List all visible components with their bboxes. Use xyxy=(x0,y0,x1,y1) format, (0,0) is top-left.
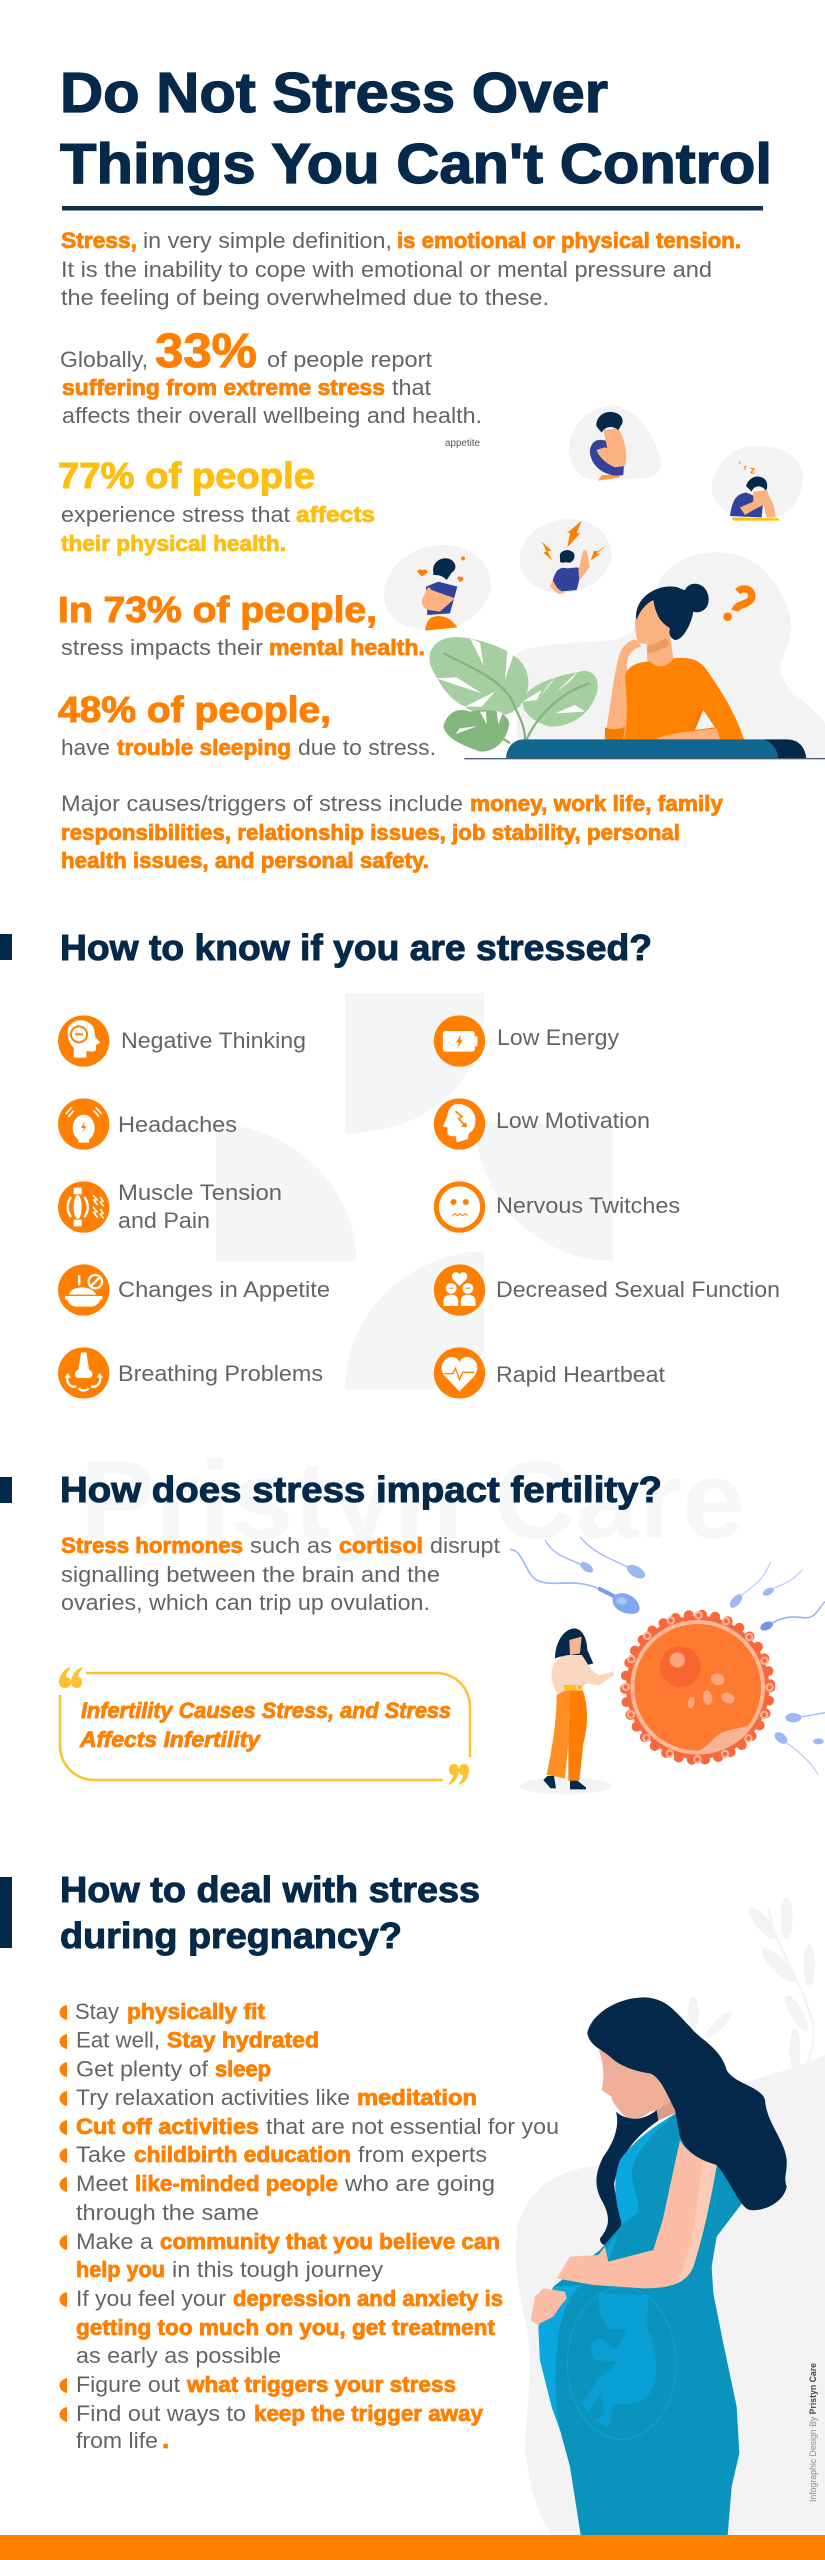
label: rapid heartbeat: Rapid Heartbeat xyxy=(496,1362,665,1387)
sperm cells xyxy=(510,1537,825,1775)
list: coping tips: Get plenty of xyxy=(76,2056,209,2082)
list: coping tips: through the same xyxy=(76,2200,259,2225)
list: coping tips: that are not essential for you xyxy=(266,2114,559,2139)
design credit: Infographic Design By Pristyn Care xyxy=(808,2363,818,2502)
stray label: appetite: appetite xyxy=(445,438,480,449)
heading: deal with stress: How to deal with stress xyxy=(60,1869,480,1910)
label: low energy: Low Energy xyxy=(497,1025,619,1050)
stat: 77 percent: 77% of people xyxy=(58,455,315,496)
bubble: anger with lightning xyxy=(520,519,612,594)
list: coping tips: childbirth education xyxy=(134,2142,351,2167)
callout xyxy=(59,1667,470,1785)
symptoms grid xyxy=(58,1015,780,1399)
list: coping tips: as early as possible xyxy=(76,2343,281,2368)
stat: 73 percent: In 73% of people, xyxy=(58,589,377,630)
icon: decreased sexual function xyxy=(434,1264,485,1316)
list: coping tips: physically fit xyxy=(127,1999,266,2024)
egg cell xyxy=(625,1615,770,1760)
stat: 33 percent: affects their overall wellbeing and health. xyxy=(62,403,482,428)
text block: major causes: responsibilities, relationship issues, job stability, personal xyxy=(61,820,680,845)
list: coping tips: who are going xyxy=(344,2171,495,2196)
list: coping tips: help you xyxy=(76,2257,165,2282)
icon: muscle tension xyxy=(58,1181,109,1233)
illustration: pregnant woman xyxy=(516,1898,825,2535)
bubble: sleepless: z xyxy=(750,465,755,476)
label: decreased sexual function: Decreased Sexual Function xyxy=(496,1277,780,1302)
text block: stress hormones: such as xyxy=(250,1533,332,1558)
title: Do Not Stress Over xyxy=(60,61,608,125)
title xyxy=(60,61,772,196)
stat: 33 percent: suffering from extreme stress xyxy=(62,375,385,400)
desk xyxy=(464,739,825,759)
list: coping tips: Cut off activities xyxy=(76,2114,259,2139)
bubble: sleepless: z xyxy=(739,460,741,465)
text block: stress definition: in very simple definition, xyxy=(143,228,392,253)
stat: 48 percent: trouble sleeping xyxy=(117,735,291,760)
backdrop blob xyxy=(517,552,825,758)
label: muscle tension and pain: Muscle Tension xyxy=(118,1180,282,1205)
list: coping tips: Make a xyxy=(76,2229,154,2254)
front hair lock xyxy=(596,2110,658,2245)
bullets xyxy=(60,2005,67,2422)
text block: stress definition: It is the inability to cope with emotional or mental pressure and xyxy=(61,257,712,282)
stat: 48 percent: 48% of people, xyxy=(58,689,331,730)
stat: 77 percent: affects xyxy=(296,502,375,527)
list: coping tips: from experts xyxy=(358,2142,487,2167)
list: coping tips: Figure out xyxy=(76,2372,180,2397)
stat: 77 percent: experience stress that xyxy=(61,502,290,527)
label: nervous twitches: Nervous Twitches xyxy=(496,1193,680,1218)
backdrop blob xyxy=(516,2055,825,2535)
text block: stress hormones: ovaries, which can trip up ovulation. xyxy=(61,1590,430,1615)
label: changes in appetite: Changes in Appetite xyxy=(118,1277,330,1302)
list: coping tips: what triggers your stress xyxy=(186,2372,456,2397)
icon: negative thinking xyxy=(58,1015,109,1067)
unborn baby xyxy=(567,2287,676,2439)
list: coping tips: Stay hydrated xyxy=(167,2028,319,2052)
background leaves xyxy=(688,1898,815,2073)
list: coping tips: Eat well, xyxy=(76,2028,160,2052)
label: low motivation: Low Motivation xyxy=(496,1108,650,1133)
stat: 33 percent: that xyxy=(392,375,431,400)
list: coping tips xyxy=(60,1999,559,2454)
label: negative thinking: Negative Thinking xyxy=(121,1028,306,1053)
text block: stress hormones: Stress hormones xyxy=(61,1533,243,1558)
text block: stress definition: is emotional or physical tension. xyxy=(397,228,741,253)
list: coping tips: Take xyxy=(76,2142,126,2167)
lower hand xyxy=(531,2288,567,2325)
text block: stress hormones: cortisol xyxy=(339,1533,423,1558)
list: coping tips: like-minded people xyxy=(135,2171,338,2196)
text block: stress definition: Stress, xyxy=(61,228,137,253)
illustration: woman beside egg and sperm xyxy=(510,1537,825,1794)
list: coping tips: Try relaxation activities like xyxy=(76,2085,350,2110)
title: Things You Can't Control xyxy=(60,132,772,196)
closing quote mark xyxy=(449,1764,469,1785)
stat: 33 percent: of people report xyxy=(267,347,432,372)
title rule xyxy=(62,206,763,210)
label: muscle tension and pain: and Pain xyxy=(118,1208,210,1233)
watermark: Pristyn Care xyxy=(80,1439,745,1562)
label: breathing problems: Breathing Problems xyxy=(118,1361,323,1386)
heading: how to know: How to know if you are stressed? xyxy=(60,927,652,968)
list: coping tips: keep the trigger away xyxy=(254,2401,484,2426)
icon: nervous twitches xyxy=(434,1181,485,1233)
stat: 73 percent xyxy=(58,589,425,660)
list: coping tips: community that you believe can xyxy=(160,2229,500,2254)
stat: 77 percent xyxy=(58,455,375,556)
section marker xyxy=(0,1877,12,1948)
list: coping tips: sleep xyxy=(215,2056,271,2082)
callout text: Affects Infertility xyxy=(79,1727,262,1752)
stat: 77 percent: their physical health. xyxy=(61,531,286,556)
text block: stress hormones: signalling between the brain and the xyxy=(61,1562,440,1587)
face xyxy=(598,2050,677,2119)
heading: fertility: How does stress impact fertility? xyxy=(60,1469,662,1510)
list: coping tips: in this tough journey xyxy=(172,2257,383,2282)
list: coping tips: Stay xyxy=(75,1999,119,2024)
text block: stress hormones: disrupt xyxy=(430,1533,500,1558)
bubble: face in hands xyxy=(569,406,661,481)
list: coping tips: depression and anxiety is xyxy=(233,2286,503,2311)
callout text: Infertility Causes Stress, and Stress xyxy=(81,1698,451,1723)
bubble: sleepless xyxy=(712,446,803,521)
list: coping tips: meditation xyxy=(357,2085,477,2110)
icon: low energy xyxy=(434,1015,485,1067)
section marker xyxy=(0,1477,12,1503)
stat: 33 percent: 33% xyxy=(155,325,257,378)
neck xyxy=(655,2100,678,2121)
text block: stress hormones xyxy=(61,1533,500,1615)
icon: rapid heartbeat xyxy=(434,1347,485,1399)
text block: major causes xyxy=(61,791,724,873)
bubble: sleepless: z xyxy=(743,464,747,471)
thinking woman xyxy=(605,584,744,739)
ground shadow xyxy=(520,1778,611,1794)
stat: 33 percent: Globally, xyxy=(60,347,148,372)
illustration: thinking woman with stress bubbles xyxy=(384,406,825,759)
stat: 48 percent xyxy=(58,689,436,760)
list: coping tips: If you feel your xyxy=(76,2286,226,2311)
opening quote mark xyxy=(59,1667,82,1688)
hair xyxy=(587,1997,787,2210)
icon: breathing problems xyxy=(58,1347,109,1399)
list: coping tips: Find out ways to xyxy=(76,2401,246,2426)
footer bar xyxy=(0,2535,825,2560)
dress highlight xyxy=(607,2113,677,2260)
icon: changes in appetite xyxy=(58,1264,109,1316)
text block: stress definition xyxy=(61,228,741,310)
stat: 33 percent xyxy=(60,325,482,428)
list: coping tips: Meet xyxy=(76,2171,128,2196)
bubble: self hug with hearts xyxy=(384,545,491,631)
background logo shapes xyxy=(216,993,613,1389)
text block: major causes: money, work life, family xyxy=(470,791,724,816)
list: coping tips: from life xyxy=(76,2428,158,2453)
heading: deal with stress: during pregnancy? xyxy=(60,1915,402,1956)
stat: 73 percent: stress impacts their xyxy=(61,635,263,660)
callout text xyxy=(79,1698,451,1752)
text block: stress definition: the feeling of being overwhelmed due to these. xyxy=(61,285,549,310)
list: coping tips: getting too much on you, get treatment xyxy=(76,2315,496,2340)
woman xyxy=(543,1628,614,1789)
heading: deal with stress xyxy=(60,1869,480,1956)
text block: major causes: Major causes/triggers of stress include xyxy=(61,791,463,816)
stat: 48 percent: have xyxy=(61,735,110,760)
stat: 48 percent: due to stress. xyxy=(298,735,436,760)
stat: 73 percent: mental health. xyxy=(269,635,425,660)
icon: headaches xyxy=(58,1098,109,1150)
list: coping tips: . xyxy=(162,2424,169,2454)
text block: major causes: health issues, and personal safety. xyxy=(61,848,429,873)
label: headaches: Headaches xyxy=(118,1112,237,1137)
arm and upper hand xyxy=(557,2140,717,2288)
plant leaves xyxy=(430,637,598,752)
question mark xyxy=(723,589,752,621)
label: muscle tension and pain xyxy=(118,1180,282,1233)
icon: low motivation xyxy=(434,1098,485,1150)
dress xyxy=(538,2112,743,2535)
section marker xyxy=(0,934,12,960)
